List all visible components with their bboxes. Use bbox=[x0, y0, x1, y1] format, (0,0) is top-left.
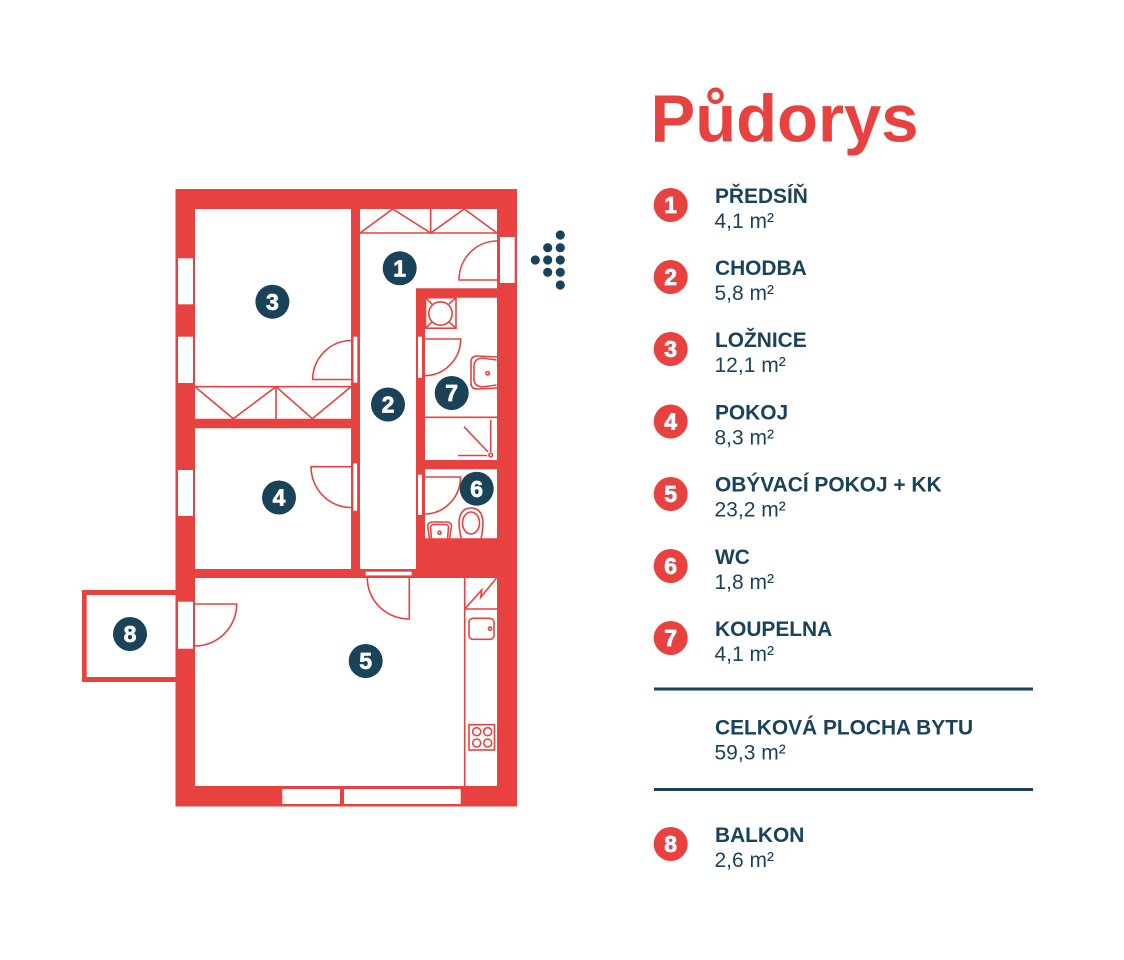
legend item 6: WC bbox=[715, 546, 750, 569]
legend item 8: 8 bbox=[664, 831, 677, 857]
apartment walls bbox=[176, 189, 517, 806]
legend item 3 bbox=[654, 328, 807, 377]
plan marker 3: 3 bbox=[266, 289, 279, 315]
legend item 2: CHODBA bbox=[715, 257, 807, 280]
legend item 1: 4,1 m² bbox=[714, 210, 774, 233]
entrance dots icon bbox=[531, 230, 565, 290]
legend item 6: 6 bbox=[664, 553, 677, 579]
legend item 8: BALKON bbox=[715, 824, 804, 847]
door swings bbox=[195, 241, 497, 646]
hob bbox=[469, 725, 494, 750]
toilet bbox=[459, 508, 483, 539]
plan marker 2: 2 bbox=[382, 392, 394, 418]
legend item 3: 3 bbox=[664, 336, 677, 362]
plan marker 7 bbox=[435, 376, 469, 410]
total area bbox=[714, 716, 973, 764]
legend item 4 bbox=[654, 402, 788, 450]
legend item 3: LOŽNICE bbox=[715, 328, 807, 352]
legend item 7: 7 bbox=[664, 625, 677, 651]
total area: 59,3 m² bbox=[714, 742, 786, 764]
plan marker 6 bbox=[460, 472, 494, 506]
plan marker 2 bbox=[371, 388, 405, 422]
legend item 6: 1,8 m² bbox=[714, 571, 774, 594]
windows bbox=[178, 237, 515, 804]
legend item 7: KOUPELNA bbox=[715, 618, 832, 641]
legend item 7 bbox=[654, 618, 832, 666]
legend item 8 bbox=[654, 824, 804, 872]
legend item 7: 4,1 m² bbox=[714, 643, 774, 666]
legend item 2: 5,8 m² bbox=[714, 282, 774, 305]
plan marker 6: 6 bbox=[470, 476, 483, 502]
plan marker 8 bbox=[113, 617, 147, 651]
legend item 2 bbox=[654, 257, 807, 305]
divider top bbox=[654, 688, 1033, 690]
legend item 6 bbox=[654, 546, 774, 594]
title: Půdorys bbox=[650, 82, 919, 156]
legend item 5 bbox=[654, 472, 942, 522]
plan marker 1: 1 bbox=[393, 256, 406, 282]
boiler bbox=[426, 298, 456, 328]
legend item 2: 2 bbox=[664, 264, 677, 290]
plan marker 8: 8 bbox=[124, 621, 137, 647]
legend item 5: OBÝVACÍ POKOJ + KK bbox=[715, 472, 942, 496]
plan marker 4: 4 bbox=[273, 485, 286, 511]
legend item 4: 8,3 m² bbox=[714, 426, 774, 450]
WC sink bbox=[425, 522, 497, 539]
legend item 3: 12,1 m² bbox=[714, 354, 786, 377]
plan marker 5 bbox=[349, 644, 383, 678]
total area: CELKOVÁ PLOCHA BYTU bbox=[715, 716, 973, 740]
legend item 5: 23,2 m² bbox=[714, 498, 786, 522]
legend item 1: PŘEDSÍŇ bbox=[715, 184, 808, 208]
wardrobe: hallway bbox=[360, 209, 497, 233]
legend item 5: 5 bbox=[664, 481, 677, 507]
kitchen sink bbox=[469, 618, 494, 639]
shower bbox=[425, 417, 497, 457]
door slits bbox=[353, 337, 422, 575]
legend item 1: 1 bbox=[664, 192, 677, 218]
balcony outline bbox=[82, 590, 178, 682]
divider bottom bbox=[654, 788, 1033, 791]
bathroom sink bbox=[471, 356, 497, 389]
kitchen counter bbox=[465, 578, 497, 786]
legend item 8: 2,6 m² bbox=[714, 849, 774, 872]
plan marker 3 bbox=[255, 285, 289, 319]
plan marker 1 bbox=[383, 251, 417, 285]
plan marker 4 bbox=[262, 480, 296, 514]
wardrobe: bedroom bbox=[195, 387, 351, 419]
plan marker 7: 7 bbox=[445, 380, 458, 406]
plan marker 5: 5 bbox=[359, 648, 372, 674]
legend item 1 bbox=[654, 184, 808, 233]
floor plan bbox=[82, 189, 517, 806]
legend item 4: POKOJ bbox=[715, 402, 788, 424]
legend item 4: 4 bbox=[664, 409, 677, 435]
